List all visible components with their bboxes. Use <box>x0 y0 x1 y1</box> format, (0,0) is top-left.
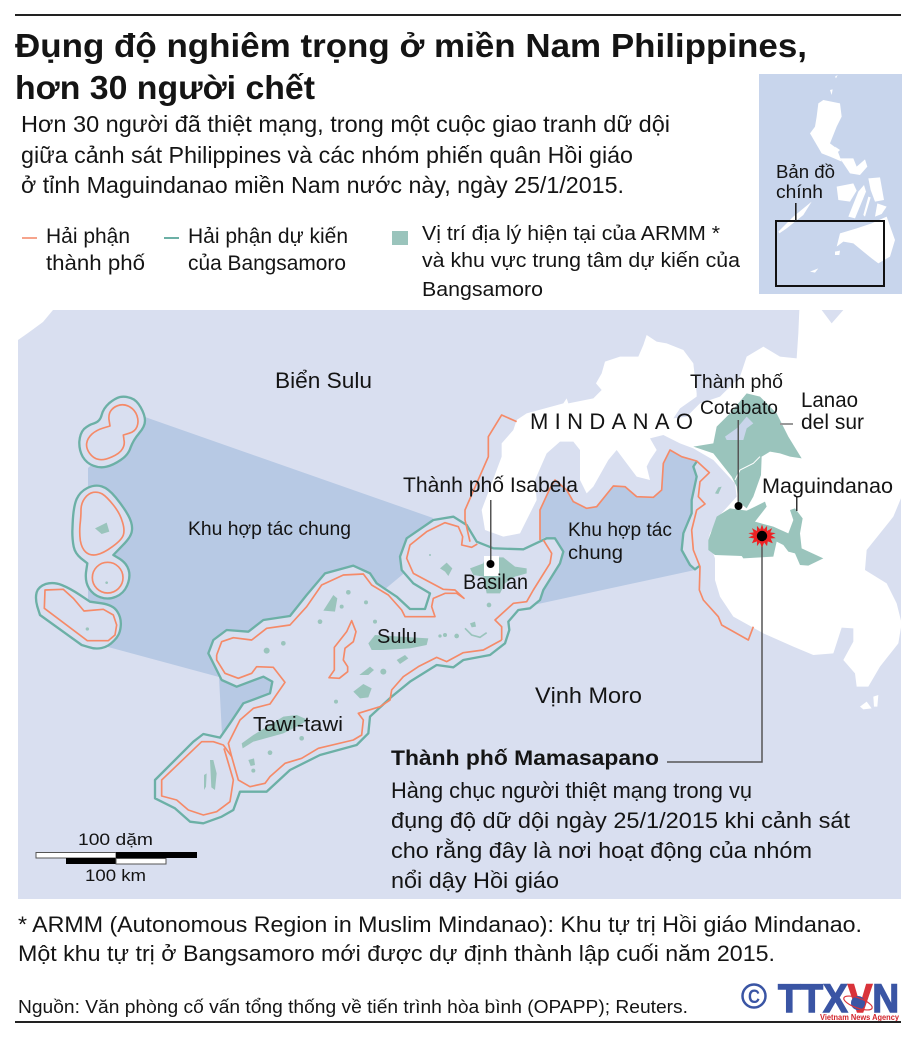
legend <box>22 223 741 301</box>
label: Lanao del Sur: del sur <box>801 411 864 434</box>
main map <box>18 310 902 899</box>
label: joint zone east <box>568 520 672 564</box>
inset label <box>776 162 835 202</box>
label: Cotabato: Thành phố <box>690 372 783 393</box>
footnote: * ARMM (Autonomous Region in Muslim Mindanao): Khu tự trị Hồi giáo Mindanao. <box>18 912 862 937</box>
Mamasapano leader <box>667 545 762 762</box>
source: Nguồn: Văn phòng cố vấn tổng thống về tiến trình hòa bình (OPAPP); Reuters. <box>18 997 688 1017</box>
Sulu island <box>368 635 428 650</box>
zone: east <box>533 450 697 605</box>
label: joint zone east: Khu hợp tác <box>568 520 672 541</box>
intro text: Hơn 30 người đã thiệt mạng, trong một cuộc giao tranh dữ dội <box>21 111 670 137</box>
label: Tawi-tawi: Tawi-tawi <box>253 714 343 736</box>
icon: copyright <box>742 984 766 1008</box>
inset label: chính <box>776 182 823 202</box>
wordmark: TTXVN <box>778 977 899 1021</box>
joint cooperation zones <box>88 417 697 735</box>
orange: main chain <box>44 523 502 815</box>
label: Sulu Sea: Biển Sulu <box>275 368 372 393</box>
callout: Mamasapano <box>391 747 850 893</box>
callout: Mamasapano: nổi dậy Hồi giáo <box>391 868 559 893</box>
label: Isabela: Thành phố Isabela <box>403 474 578 497</box>
callout: Mamasapano: Thành phố Mamasapano <box>391 747 659 770</box>
intro text <box>21 111 670 198</box>
inset: main map frame <box>776 221 884 286</box>
islands: Bangsamoro boundary main chain <box>36 517 563 823</box>
TTXVN logo <box>742 977 900 1022</box>
Cotabato marker <box>734 420 742 510</box>
scale bar: 100 km <box>85 866 146 885</box>
legend: city waters: Hải phận <box>46 225 130 248</box>
legend: proposed Bangsamoro waters: của Bangsamoro <box>188 252 346 275</box>
Basilan island <box>429 554 527 627</box>
legend: ARMM area <box>392 223 741 301</box>
Lanao del Sur leader <box>780 423 793 425</box>
city water boundaries <box>44 405 753 815</box>
tagline: Vietnam News Agency <box>820 1013 900 1022</box>
label: joint zone west: Khu hợp tác chung <box>188 519 351 540</box>
label: Lanao del Sur <box>801 389 864 434</box>
legend: proposed Bangsamoro waters <box>164 225 348 275</box>
footnote: Một khu tự trị ở Bangsamoro mới được dự định thành lập cuối năm 2015. <box>18 941 775 966</box>
legend: proposed Bangsamoro waters: Hải phận dự kiến <box>188 225 348 248</box>
globe emblem <box>842 993 874 1013</box>
title: hơn 30 người chết <box>15 69 315 106</box>
label: Basilan: Basilan <box>463 571 528 594</box>
intro text: ở tỉnh Maguindanao miền Nam nước này, ngày 25/1/2015. <box>21 172 624 198</box>
legend: city waters <box>22 225 145 275</box>
legend: ARMM area: Vị trí địa lý hiện tại của ARMM * <box>422 223 720 245</box>
intro text: giữa cảnh sát Philippines và các nhóm phiến quân Hồi giáo <box>21 142 633 168</box>
legend: ARMM area: và khu vực trung tâm dự kiến của <box>422 250 741 272</box>
orange: Mindanao coastal <box>465 415 753 640</box>
Mindanao land <box>482 310 902 709</box>
legend: ARMM area: Bangsamoro <box>422 279 543 301</box>
icon: clash explosion <box>748 524 776 548</box>
zone: west <box>88 417 433 735</box>
label: Cotabato <box>690 372 783 419</box>
label: Sulu: Sulu <box>377 626 417 648</box>
footnote <box>18 912 862 966</box>
inset locator map <box>759 74 902 294</box>
Lanao del Sur <box>693 393 802 508</box>
Maguindanao <box>708 502 823 566</box>
callout: Mamasapano: đụng độ dữ dội ngày 25/1/2015 khi cảnh sát <box>391 808 850 833</box>
inset label: Bản đồ <box>776 162 835 182</box>
title <box>15 27 807 106</box>
callout: Mamasapano: cho rằng đây là nơi hoạt động của nhóm <box>391 838 812 863</box>
label: joint zone east: chung <box>568 543 623 564</box>
ARMM mainland areas <box>693 393 823 566</box>
label: Maguindanao: Maguindanao <box>762 475 893 498</box>
islands: Bangsamoro boundary west group <box>72 397 145 599</box>
sea <box>18 310 901 899</box>
map labels <box>188 368 893 736</box>
Maguindanao leader <box>796 497 798 511</box>
Isabela marker <box>484 500 499 576</box>
Tawi-tawi island <box>242 715 308 748</box>
callout: Mamasapano: Hàng chục người thiệt mạng trong vụ <box>391 778 752 803</box>
scale bar <box>36 830 197 885</box>
legend: city waters: thành phố <box>46 252 145 275</box>
inset: Philippines land <box>778 75 895 273</box>
label: Cotabato: Cotabato <box>700 398 778 419</box>
teal line: east proposed boundary <box>682 462 699 569</box>
label: Lanao del Sur: Lanao <box>801 389 858 412</box>
label: Moro Gulf: Vịnh Moro <box>535 683 642 708</box>
title: Đụng độ nghiêm trọng ở miền Nam Philippines, <box>15 27 807 64</box>
scale bar: 100 dặm <box>78 830 153 849</box>
icon: copyright: C <box>748 987 760 1008</box>
island land masses <box>86 523 487 790</box>
orange: west islands <box>80 405 138 593</box>
label: Mindanao: MINDANAO <box>530 409 693 434</box>
